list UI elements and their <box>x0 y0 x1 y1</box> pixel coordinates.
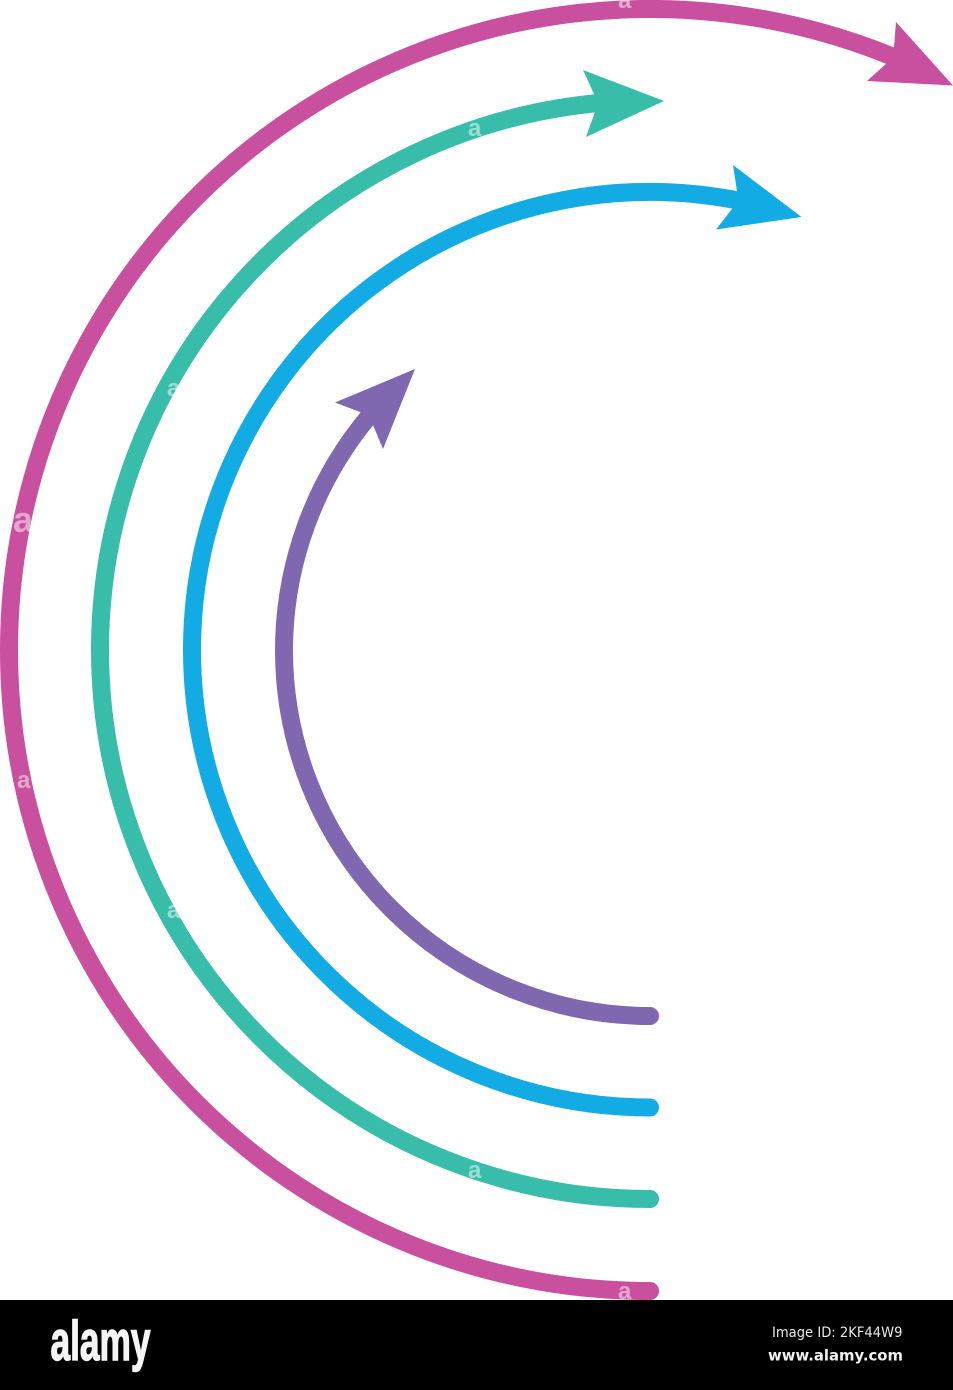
footer bar <box>0 1300 953 1390</box>
watermark letters: a <box>167 375 181 402</box>
arrow: purple inner arc <box>284 369 650 1016</box>
arrow: blue arc <box>192 165 802 1108</box>
watermark letters: a <box>167 897 181 924</box>
footer website: www.alamy.com <box>768 1346 903 1364</box>
watermark letters: a <box>468 1157 482 1184</box>
watermark letters: a <box>17 767 31 794</box>
arrow: teal arc <box>100 70 664 1199</box>
watermark letters: a <box>468 115 482 142</box>
watermark letters: a <box>618 1278 632 1305</box>
footer image id: Image ID: 2KF44W9 <box>772 1325 902 1341</box>
footer logo: alamy: alamy <box>50 1309 150 1372</box>
watermark letters: a <box>13 499 34 540</box>
watermark letters <box>13 0 632 1305</box>
